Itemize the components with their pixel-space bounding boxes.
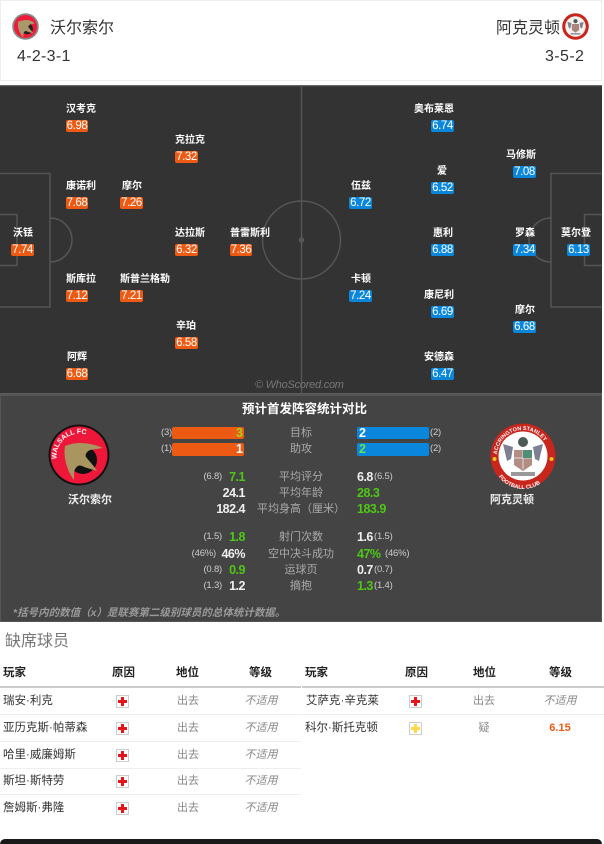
away formation: 3-5-2 — [545, 48, 584, 65]
player: 达拉斯: 达拉斯 — [175, 228, 205, 239]
table header — [302, 660, 604, 688]
stat row: 摘抱: (1.4) — [374, 580, 393, 591]
row: 詹姆斯·弗隆: 詹姆斯·弗隆 — [3, 802, 64, 814]
row: 亚历克斯·帕蒂森 — [0, 715, 301, 742]
footer bar — [0, 839, 602, 844]
home formation: 4-2-3-1 — [17, 48, 71, 65]
stat row: 运球页: (0.8) — [203, 564, 222, 575]
player: 斯普兰格勒 — [120, 273, 170, 302]
stat row: 空中决斗成功: 空中决斗成功 — [268, 548, 334, 560]
player: 惠利: 6.88 — [432, 244, 453, 256]
row: 亚历克斯·帕蒂森: 不适用 — [244, 722, 278, 734]
player: 爱 — [431, 165, 454, 194]
stat row: 运球页: 运球页 — [284, 564, 318, 576]
row: 亚历克斯·帕蒂森: 出去 — [177, 722, 199, 734]
stat row: 摘抱 — [203, 579, 393, 593]
row: 科尔·斯托克顿: 科尔·斯托克顿 — [305, 722, 378, 734]
pitch markings — [0, 85, 602, 395]
stat row: 平均身高: 183.9 — [357, 502, 386, 516]
panel: predicted lineup stat comparison — [0, 395, 602, 622]
stat row: 运球页: 0.7 — [357, 563, 373, 577]
stat row: 摘抱: 1.3 — [357, 579, 373, 593]
panel: football pitch with player ratings — [0, 85, 602, 395]
row: 艾萨克·辛克莱: 出去 — [473, 695, 495, 707]
player: 沃铥 — [11, 227, 34, 256]
stat row: 助攻 — [161, 442, 441, 456]
player: 达拉斯 — [175, 226, 205, 256]
player: 罗森: 罗森 — [515, 228, 535, 239]
player: 康尼利 — [424, 289, 454, 318]
row: 斯坦·斯特劳: 不适用 — [244, 775, 278, 787]
player: 安德森 — [424, 351, 454, 380]
home team name: 沃尔索尔 — [50, 20, 114, 37]
stat row: 目标: (3) — [161, 427, 172, 438]
player: 克拉克: 7.32 — [176, 151, 197, 163]
player: 摩尔 — [120, 180, 143, 209]
stat row: 目标: (2) — [430, 427, 441, 438]
stat row: 目标: 目标 — [290, 427, 312, 439]
table: home missing players — [0, 666, 301, 815]
stat row: 目标: 3 — [236, 426, 243, 440]
row: 瑞安·利克: 瑞安·利克 — [3, 695, 53, 707]
player: 摩尔 (away): 6.68 — [514, 321, 535, 333]
stat row: 射门次数: 1.6 — [357, 530, 373, 544]
row: 詹姆斯·弗隆: 出去 — [177, 802, 199, 814]
away team name: 阿克灵顿 — [496, 20, 560, 37]
footnote: *括号内的数值（x）是联赛第二级别球员的总体统计数据。 — [13, 607, 285, 619]
stat row: 平均年龄: 24.1 — [223, 486, 245, 500]
watermark: © WhoScored.com — [255, 379, 344, 391]
player: 莫尔登 — [561, 227, 591, 256]
player: 马修斯: 马修斯 — [506, 150, 536, 161]
row: 瑞安·利克: 不适用 — [244, 695, 278, 707]
stat row: 平均评分: 平均评分 — [279, 471, 323, 483]
stat row: 运球页: 0.9 — [229, 563, 245, 577]
stat row: 平均评分: (6.8) — [203, 471, 222, 482]
icon: Walsall FC crest: WALSALL FC — [52, 428, 86, 459]
row: 斯坦·斯特劳: 出去 — [177, 775, 199, 787]
stat row: 平均评分: (6.5) — [374, 471, 393, 482]
stat row: 平均年龄: 28.3 — [357, 486, 379, 500]
row: 哈里·威廉姆斯: 出去 — [177, 749, 199, 761]
stat row: 平均身高: 182.4 — [216, 502, 245, 516]
player: 安德森: 6.47 — [432, 368, 453, 380]
player: 阿辉: 阿辉 — [67, 352, 87, 363]
player: 斯库拉: 斯库拉 — [66, 274, 96, 285]
player: 卡顿: 7.24 — [350, 290, 371, 302]
stat row: 平均年龄 — [223, 486, 380, 500]
row: 斯坦·斯特劳 — [0, 768, 301, 795]
stat row: 目标 — [161, 426, 441, 440]
header: team names and formations — [0, 0, 602, 81]
player: 莫尔登: 莫尔登 — [561, 228, 591, 239]
player: 康诺利: 7.68 — [67, 197, 87, 209]
heading: missing players: 缺席球员 — [5, 633, 69, 650]
player: 阿辉: 6.68 — [67, 368, 87, 380]
stat row: 摘抱: 1.2 — [229, 579, 245, 593]
stat row: 射门次数: 1.8 — [229, 530, 245, 544]
player: 爱: 6.52 — [432, 182, 453, 194]
stat row: 运球页 — [203, 563, 393, 577]
stat row: 平均评分: 7.1 — [229, 470, 245, 484]
player: 康诺利 — [66, 180, 96, 209]
row: 科尔·斯托克顿: 6.15 — [549, 722, 571, 734]
player: 斯普兰格勒: 7.21 — [121, 290, 142, 302]
stat row: 射门次数: (1.5) — [374, 531, 393, 542]
player: 汉考克: 6.98 — [67, 120, 87, 132]
player: 惠利 — [431, 227, 454, 256]
player: 斯库拉: 7.12 — [67, 290, 87, 302]
stat row: 摘抱: 摘抱 — [290, 580, 312, 592]
icon: Accrington Stanley crest — [490, 424, 556, 489]
stat row: 运球页: (0.7) — [374, 564, 393, 575]
player: 罗森: 7.34 — [514, 244, 535, 256]
player: 摩尔 (away) — [513, 304, 536, 333]
player: 奥布莱恩 — [414, 103, 454, 132]
player: 爱: 爱 — [437, 166, 447, 177]
player: 卡顿: 卡顿 — [351, 274, 371, 285]
table header: 地位 — [473, 667, 496, 679]
player: 摩尔 (away): 摩尔 — [515, 305, 535, 316]
player: 安德森: 安德森 — [424, 352, 454, 363]
row: 詹姆斯·弗隆 — [3, 801, 278, 815]
home team label: 沃尔索尔 — [68, 494, 112, 506]
table header: 原因 — [405, 667, 428, 679]
player: 马修斯 — [506, 149, 536, 178]
row: 亚历克斯·帕蒂森: 亚历克斯·帕蒂森 — [3, 722, 87, 734]
player: 克拉克 — [175, 134, 205, 163]
row: 哈里·威廉姆斯 — [0, 742, 301, 769]
table header: 原因 — [112, 667, 135, 679]
stat row: 助攻: (2) — [430, 443, 441, 454]
player: 汉考克: 汉考克 — [66, 104, 96, 115]
player: 辛珀: 辛珀 — [176, 321, 196, 332]
row: 瑞安·利克 — [0, 688, 301, 715]
stat row: 平均评分 — [203, 470, 393, 484]
stat row: 平均身高 — [216, 502, 386, 516]
player: 卡顿 — [349, 273, 372, 302]
stat row: 空中决斗成功: (46%) — [192, 548, 216, 559]
stat row: 空中决斗成功: 46% — [221, 547, 245, 561]
player: 沃铥: 7.74 — [12, 244, 33, 256]
row: 詹姆斯·弗隆: 不适用 — [244, 802, 278, 814]
row: 艾萨克·辛克莱: 不适用 — [544, 695, 576, 707]
stat row: 助攻: 2 — [359, 442, 366, 456]
player: 达拉斯: 6.32 — [176, 244, 197, 256]
table header: 地位 — [176, 667, 199, 679]
stat row: 目标: 2 — [359, 426, 366, 440]
row: 艾萨克·辛克莱 — [302, 688, 604, 715]
player: 斯普兰格勒: 斯普兰格勒 — [120, 274, 170, 285]
player: 伍兹: 伍兹 — [351, 181, 371, 192]
player: 普雷斯利: 普雷斯利 — [230, 228, 270, 239]
stat row: 助攻: 助攻 — [290, 443, 312, 455]
icon: Accrington crest small — [562, 13, 589, 40]
player: 伍兹 — [349, 180, 372, 209]
stat row: 射门次数: (1.5) — [203, 531, 222, 542]
stat row: 助攻: 1 — [236, 442, 243, 456]
player: 康诺利: 康诺利 — [66, 181, 96, 192]
row: 科尔·斯托克顿: 疑 — [478, 722, 490, 734]
player: 康尼利: 康尼利 — [424, 290, 454, 301]
stat row: 助攻: (1) — [161, 443, 172, 454]
table header: 玩家 — [305, 667, 328, 679]
stat row: 空中决斗成功: 47% — [357, 547, 381, 561]
stat row: 空中决斗成功 — [192, 547, 409, 561]
player: 摩尔: 7.26 — [121, 197, 142, 209]
row: 科尔·斯托克顿 — [305, 721, 571, 735]
row: 哈里·威廉姆斯: 不适用 — [244, 749, 278, 761]
table header: 等级 — [249, 667, 272, 679]
player: 克拉克: 克拉克 — [175, 135, 205, 146]
player: 普雷斯利 — [230, 227, 270, 256]
player: 马修斯: 7.08 — [514, 166, 535, 178]
row: 斯坦·斯特劳: 斯坦·斯特劳 — [3, 775, 64, 787]
row: 瑞安·利克: 出去 — [177, 695, 199, 707]
icon: Walsall crest small — [12, 13, 39, 40]
icon: Walsall FC crest — [48, 424, 110, 486]
away team label: 阿克灵顿 — [490, 494, 534, 506]
stats heading: 预计首发阵容统计对比 — [242, 402, 367, 416]
table header: 等级 — [549, 667, 572, 679]
stat row: 射门次数 — [203, 530, 393, 544]
player: 辛珀: 6.58 — [176, 337, 197, 349]
player: 普雷斯利: 7.36 — [231, 244, 251, 256]
player: 沃铥: 沃铥 — [13, 228, 33, 239]
stat row: 平均年龄: 平均年龄 — [279, 487, 323, 499]
table header — [0, 660, 301, 688]
player: 阿辉 — [66, 351, 88, 380]
player: 奥布莱恩: 6.74 — [432, 120, 453, 132]
player: 伍兹: 6.72 — [350, 197, 371, 209]
stat row: 射门次数: 射门次数 — [279, 531, 323, 543]
row: 艾萨克·辛克莱: 艾萨克·辛克莱 — [306, 695, 379, 707]
stat row: 摘抱: (1.3) — [203, 580, 222, 591]
table: away missing players — [302, 666, 604, 735]
stat row: 空中决斗成功: (46%) — [385, 548, 409, 559]
player: 摩尔: 摩尔 — [122, 181, 142, 192]
player: 罗森 — [513, 227, 536, 256]
player: 康尼利: 6.69 — [432, 306, 453, 318]
stat row: 平均身高: 平均身高（厘米） — [257, 503, 345, 515]
player: 斯库拉 — [66, 272, 96, 302]
player: 莫尔登: 6.13 — [568, 244, 589, 256]
stat row: 平均评分: 6.8 — [357, 470, 373, 484]
icon: Accrington Stanley crest: ACCRINGTON STANLEY — [493, 426, 548, 454]
table header: 玩家 — [3, 667, 26, 679]
player: 辛珀 — [175, 320, 198, 349]
player: 惠利: 惠利 — [433, 228, 453, 239]
player: 汉考克 — [66, 103, 96, 132]
row: 哈里·威廉姆斯: 哈里·威廉姆斯 — [3, 749, 76, 761]
player: 奥布莱恩: 奥布莱恩 — [414, 104, 454, 115]
